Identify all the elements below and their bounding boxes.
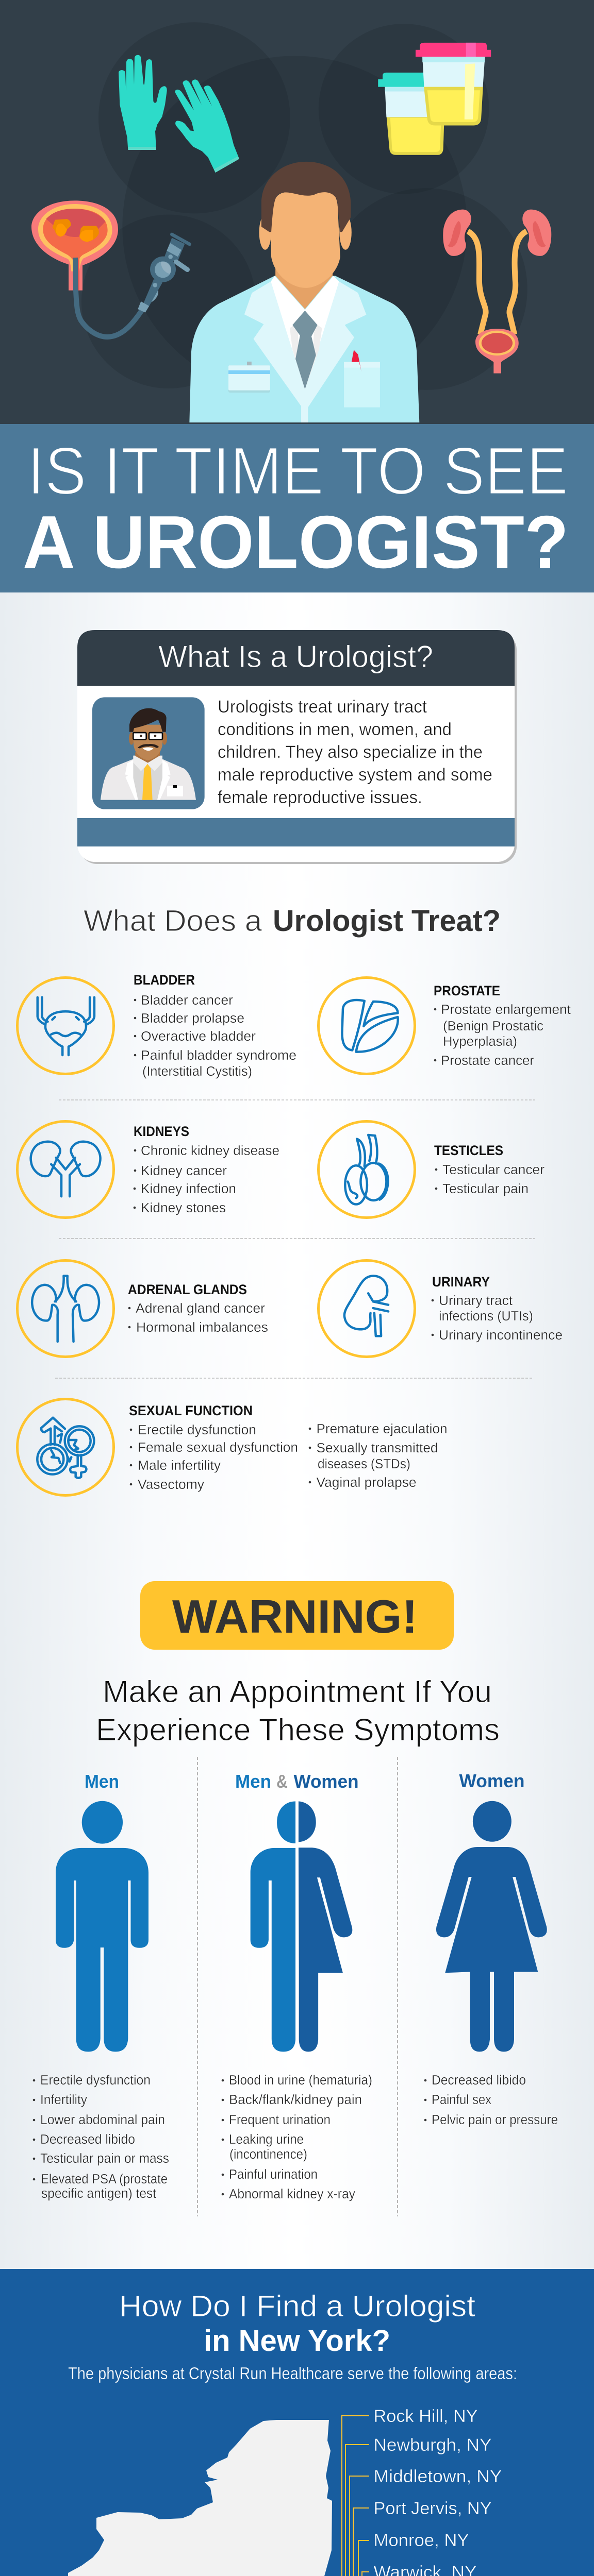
symptom list: Frequent urination bbox=[229, 2113, 331, 2127]
list: Prostate enlargement bbox=[441, 1003, 571, 1017]
panel: find a urologist in new york bbox=[0, 2269, 594, 2576]
treat item: testicles bbox=[319, 1121, 545, 1218]
column label: Men bbox=[235, 1771, 271, 1792]
list: Hyperplasia) bbox=[443, 1035, 517, 1049]
list bbox=[134, 993, 296, 1079]
list bbox=[128, 1301, 268, 1335]
symptom list: specific antigen) test bbox=[41, 2187, 156, 2201]
column label: Men bbox=[85, 1771, 119, 1792]
icon: urinary outline bbox=[319, 1260, 415, 1357]
icon: testicles outline bbox=[319, 1121, 415, 1218]
list: Female sexual dysfunction bbox=[138, 1440, 298, 1455]
treat item: sexual function bbox=[18, 1399, 448, 1495]
map: new york state bbox=[68, 2420, 389, 2576]
icon: gloves bbox=[119, 55, 239, 173]
section heading: in New York? bbox=[204, 2324, 390, 2358]
heading: URINARY bbox=[432, 1274, 490, 1290]
card body text: conditions in men, women, and bbox=[218, 720, 452, 739]
background circles bbox=[81, 22, 527, 398]
icon: bladder with scope bbox=[31, 200, 190, 337]
figure: half man half woman bbox=[251, 1801, 352, 2052]
symptom list bbox=[33, 2073, 169, 2201]
list: Testicular cancer bbox=[442, 1163, 545, 1177]
symptom list: Back/flank/kidney pain bbox=[229, 2093, 362, 2107]
heading: make an appointment bbox=[96, 1674, 500, 1747]
symptom list: Painful sex bbox=[432, 2093, 491, 2107]
symptom list: Infertility bbox=[40, 2093, 87, 2107]
symptom list: Blood in urine (hematuria) bbox=[229, 2073, 372, 2088]
title band bbox=[0, 424, 594, 592]
treat item: kidneys bbox=[18, 1121, 279, 1218]
list: Sexually transmitted bbox=[317, 1441, 438, 1455]
icon: specimen cups bbox=[378, 43, 491, 155]
intro line: The physicians at Crystal Run Healthcare serve the following areas: bbox=[68, 2364, 517, 2383]
symptom list: Abnormal kidney x-ray bbox=[229, 2187, 355, 2201]
ears bbox=[259, 215, 271, 250]
heading: SEXUAL FUNCTION bbox=[129, 1403, 253, 1418]
list: (Interstitial Cystitis) bbox=[142, 1064, 252, 1079]
list: Bladder cancer bbox=[141, 993, 234, 1008]
shirt bbox=[271, 276, 339, 389]
list: Kidney stones bbox=[141, 1201, 226, 1215]
list: Erectile dysfunction bbox=[138, 1423, 256, 1437]
list: Premature ejaculation bbox=[317, 1422, 448, 1436]
list: Bladder prolapse bbox=[141, 1011, 244, 1026]
figure: man bbox=[56, 1801, 148, 2052]
card body text: children. They also specialize in the bbox=[218, 742, 483, 762]
list bbox=[434, 1003, 571, 1068]
coat lapels bbox=[244, 281, 366, 422]
symptom list: Leaking urine bbox=[229, 2132, 304, 2147]
card heading: What Is a Urologist? bbox=[158, 639, 433, 674]
town labels: Rock Hill, NY bbox=[373, 2406, 477, 2426]
section heading bbox=[119, 2290, 475, 2358]
heading: make an appointment: Experience These Symptoms bbox=[96, 1713, 500, 1747]
icon: prostate outline bbox=[319, 978, 415, 1074]
list: (Benign Prostatic bbox=[443, 1019, 543, 1033]
treat item: adrenal glands bbox=[18, 1260, 268, 1357]
symptom list: Erectile dysfunction bbox=[40, 2073, 151, 2088]
column label bbox=[235, 1771, 359, 1792]
heading: ADRENAL GLANDS bbox=[128, 1282, 247, 1297]
heading: KIDNEYS bbox=[134, 1124, 189, 1139]
warning banner bbox=[140, 1581, 454, 1650]
neck bbox=[275, 264, 333, 309]
card body text bbox=[218, 697, 492, 807]
treat item: urinary bbox=[319, 1260, 563, 1357]
list: Chronic kidney disease bbox=[141, 1144, 279, 1158]
list bbox=[435, 1163, 545, 1196]
panel: what is a urologist bbox=[77, 630, 517, 864]
list: Testicular pain bbox=[442, 1182, 529, 1196]
face bbox=[271, 191, 340, 288]
icon: adrenal glands outline bbox=[18, 1260, 113, 1357]
section background: light body bbox=[0, 592, 594, 2269]
heading: make an appointment: Make an Appointment If You bbox=[103, 1674, 492, 1709]
list bbox=[130, 1422, 447, 1492]
card body text: male reproductive system and some bbox=[218, 765, 492, 785]
list: diseases (STDs) bbox=[318, 1457, 410, 1471]
list: infections (UTIs) bbox=[439, 1309, 533, 1324]
list: Vasectomy bbox=[138, 1478, 204, 1492]
list: Urinary tract bbox=[439, 1294, 513, 1308]
list bbox=[432, 1294, 563, 1343]
pocket and pen bbox=[344, 362, 380, 408]
treat item: prostate bbox=[319, 978, 571, 1074]
town labels: Middletown, NY bbox=[373, 2467, 502, 2486]
town labels: Monroe, NY bbox=[373, 2531, 469, 2550]
symptom list: Decreased libido bbox=[432, 2073, 526, 2088]
figure: woman bbox=[436, 1801, 547, 2052]
heading: what does a urologist treat: Urologist Treat? bbox=[273, 904, 501, 938]
symptom list: Elevated PSA (prostate bbox=[41, 2172, 168, 2187]
list: Overactive bladder bbox=[141, 1029, 256, 1044]
icon: bladder outline bbox=[18, 978, 113, 1074]
list: Adrenal gland cancer bbox=[136, 1301, 266, 1316]
symptom list: Painful urination bbox=[229, 2167, 318, 2182]
heading: PROSTATE bbox=[434, 983, 500, 998]
list: Male infertility bbox=[138, 1459, 221, 1473]
town labels: Newburgh, NY bbox=[373, 2435, 492, 2455]
treat item: bladder bbox=[18, 972, 296, 1079]
list: Urinary incontinence bbox=[439, 1328, 563, 1343]
doctor figure bbox=[189, 162, 419, 422]
heading: what does a urologist treat bbox=[84, 904, 501, 938]
title line two: A UROLOGIST? bbox=[23, 500, 569, 584]
column label: Women bbox=[459, 1770, 525, 1791]
avatar: urologist with glasses bbox=[92, 697, 205, 809]
card body text: female reproductive issues. bbox=[218, 788, 422, 807]
town labels bbox=[373, 2406, 504, 2576]
symptom list bbox=[424, 2073, 558, 2127]
list bbox=[134, 1144, 279, 1215]
icon: kidneys outline bbox=[18, 1121, 113, 1218]
warning banner: WARNING! bbox=[172, 1591, 418, 1643]
column label: & bbox=[276, 1771, 288, 1792]
icon: gender symbols bbox=[18, 1399, 113, 1495]
symptom list: Pelvic pain or pressure bbox=[432, 2113, 558, 2127]
hair bbox=[261, 162, 351, 232]
symptom list bbox=[222, 2073, 372, 2201]
town labels: Port Jervis, NY bbox=[373, 2499, 492, 2518]
list: Kidney infection bbox=[141, 1182, 236, 1196]
column: men bbox=[33, 1771, 169, 2201]
column: women bbox=[424, 1770, 558, 2127]
symptom list: Decreased libido bbox=[40, 2132, 135, 2147]
list: Hormonal imbalances bbox=[136, 1320, 268, 1335]
heading: TESTICLES bbox=[434, 1143, 503, 1158]
card body text: Urologists treat urinary tract bbox=[218, 697, 427, 717]
connector lines bbox=[277, 2416, 369, 2576]
symptom list: (incontinence) bbox=[229, 2147, 307, 2162]
icon: kidneys and bladder bbox=[443, 210, 551, 374]
symptom list: Testicular pain or mass bbox=[40, 2151, 169, 2166]
heading: BLADDER bbox=[134, 972, 195, 988]
column label: Women bbox=[294, 1771, 359, 1792]
column: men and women bbox=[222, 1771, 372, 2201]
list: Prostate cancer bbox=[441, 1054, 535, 1068]
symptom list: Lower abdominal pain bbox=[40, 2113, 165, 2127]
list: Vaginal prolapse bbox=[317, 1476, 417, 1490]
lab coat bbox=[189, 276, 419, 422]
section heading: How Do I Find a Urologist bbox=[119, 2290, 475, 2323]
hero illustration panel bbox=[0, 0, 594, 424]
heading: what does a urologist treat: What Does a bbox=[84, 904, 262, 938]
badge bbox=[247, 362, 252, 369]
list: Kidney cancer bbox=[141, 1164, 227, 1178]
list: Painful bladder syndrome bbox=[141, 1048, 296, 1063]
tie bbox=[292, 311, 318, 389]
